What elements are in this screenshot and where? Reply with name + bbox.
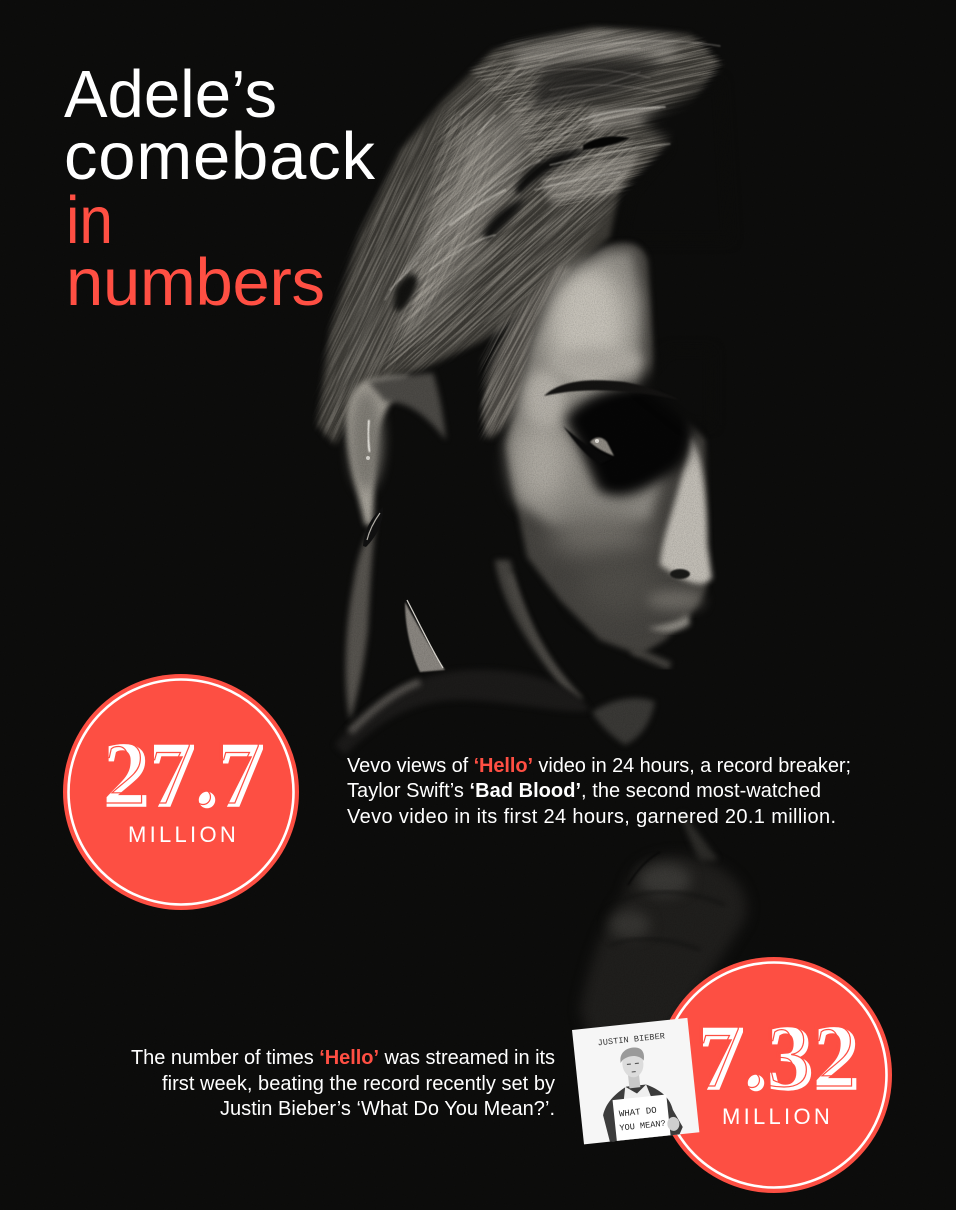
front hair lock <box>483 262 572 440</box>
album cover: What Do You Mean? <box>572 1018 699 1144</box>
figure: 27.7: 27.7 <box>104 724 264 826</box>
fingers across the bottom <box>335 670 590 755</box>
unit: million: MILLION <box>722 1104 833 1129</box>
title <box>64 57 376 320</box>
album artist: JUSTIN BIEBER <box>597 1031 666 1048</box>
sign: YOU MEAN? <box>619 1119 666 1134</box>
face <box>507 243 712 700</box>
figure: 7.32: 7.32 <box>698 1007 860 1109</box>
lower lip <box>632 650 670 666</box>
text block: Vevo views: Taylor Swift’s ‘Bad Blood’, the second most-watched <box>347 780 821 802</box>
eye <box>563 426 612 464</box>
figure: 7.32: 7.32 <box>694 1004 856 1106</box>
eyebrow <box>544 380 680 400</box>
lower hand <box>580 812 747 1040</box>
text block: Vevo views: Vevo video in its first 24 hours, garnered 20.1 million. <box>347 806 836 828</box>
title: comeback <box>64 119 376 194</box>
text block: number of streams <box>131 1047 555 1120</box>
upper lip <box>648 614 690 631</box>
hair strand texture: centre <box>378 57 640 374</box>
hair strand texture: top <box>469 26 724 210</box>
nostril <box>670 569 690 579</box>
hand on phone <box>335 507 655 755</box>
strands behind the neck <box>495 560 585 700</box>
title: in <box>66 183 113 258</box>
hair gap shadows <box>583 136 630 150</box>
sign: WHAT DO <box>619 1106 657 1120</box>
eye socket shadow <box>565 384 693 496</box>
fingernail <box>363 507 383 547</box>
text block: number of streams: The number of times ‘Hello’ was streamed in its <box>131 1047 555 1069</box>
text block: number of streams: first week, beating the record recently set by <box>162 1073 555 1095</box>
stat badge: 27.7 million <box>63 674 299 910</box>
jaw line <box>510 575 580 700</box>
hair strands <box>385 41 720 300</box>
telephone handset <box>347 373 446 672</box>
title: numbers <box>66 245 325 320</box>
hair strand texture: left <box>316 108 500 440</box>
unit: million: MILLION <box>128 822 239 847</box>
text block: Vevo views: Vevo views of ‘Hello’ video in 24 hours, a record breaker; <box>347 755 851 777</box>
text block: Vevo views <box>347 755 851 828</box>
title: Adele’s <box>64 57 277 132</box>
text block: number of streams: Justin Bieber’s ‘What Do You Mean?’. <box>220 1098 555 1120</box>
figure: 27.7: 27.7 <box>100 721 260 823</box>
stat badge: 7.32 million <box>656 957 892 1193</box>
figure <box>596 1043 683 1142</box>
hair mass <box>314 24 724 696</box>
sign <box>613 1093 680 1141</box>
